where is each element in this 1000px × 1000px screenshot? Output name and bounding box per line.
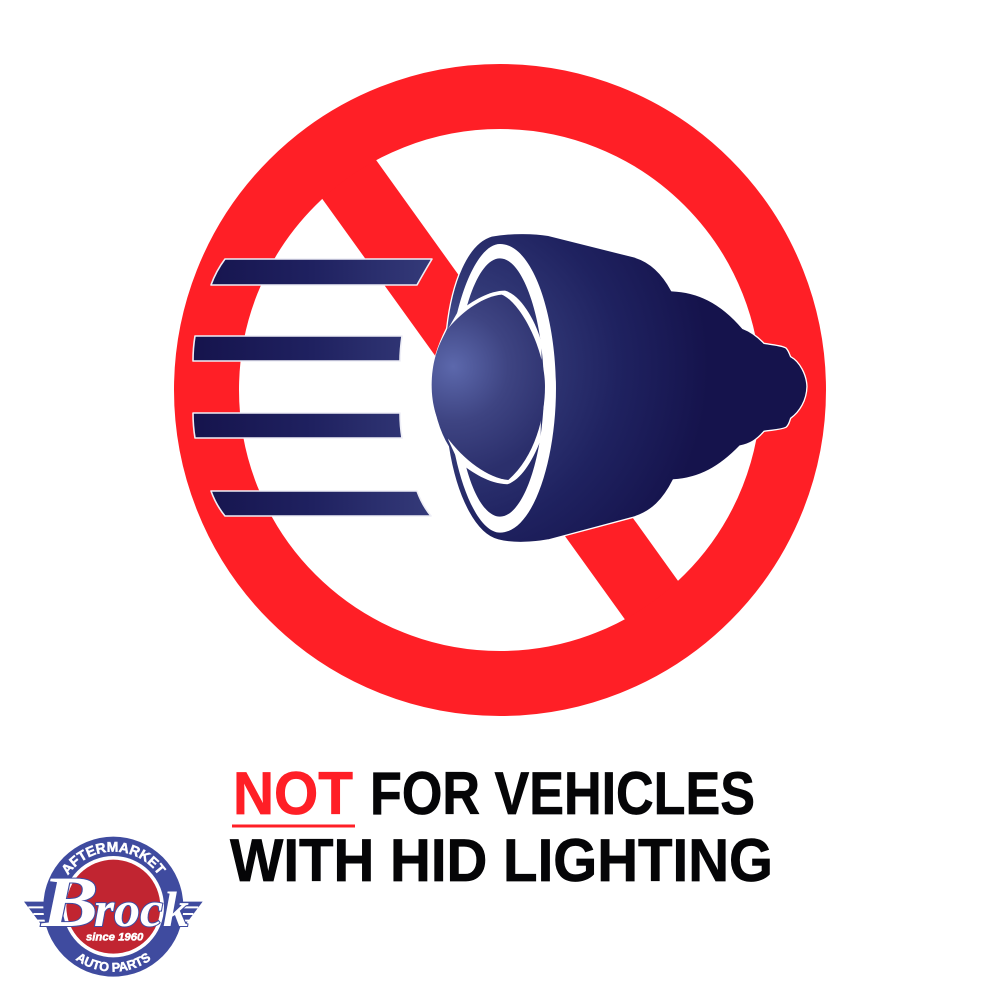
underline	[232, 824, 355, 828]
lens	[432, 295, 545, 480]
beam 1	[211, 259, 432, 285]
arc text: auto parts: AUTO PARTS	[75, 953, 150, 972]
logo: Brock Aftermarket Auto Parts	[24, 836, 203, 977]
red center	[66, 860, 160, 954]
white ring	[63, 856, 164, 957]
NOT: NOT	[233, 760, 353, 827]
Brock script: rock	[94, 881, 189, 937]
caption	[230, 760, 773, 894]
red diagonal bar	[313, 146, 686, 632]
icon: headlight bulb	[432, 233, 807, 542]
beam 4	[211, 491, 431, 516]
light beams	[193, 259, 432, 516]
lens outline	[448, 291, 542, 484]
white reflector ring	[448, 244, 556, 533]
Brock script	[40, 863, 189, 942]
beam 2	[193, 336, 402, 361]
since 1960: since 1960	[86, 932, 143, 944]
beam 3	[193, 413, 402, 438]
Brock script: B	[40, 863, 98, 942]
arc text: aftermarket: AFTERMARKET	[62, 842, 166, 876]
line one: FOR VEHICLES	[370, 760, 755, 827]
blue badge	[43, 837, 183, 977]
line two: WITH HID LIGHTING	[230, 827, 773, 894]
red ring	[206, 96, 794, 684]
wings	[24, 902, 203, 927]
prohibition sign	[206, 96, 794, 684]
bulb body	[432, 233, 807, 542]
